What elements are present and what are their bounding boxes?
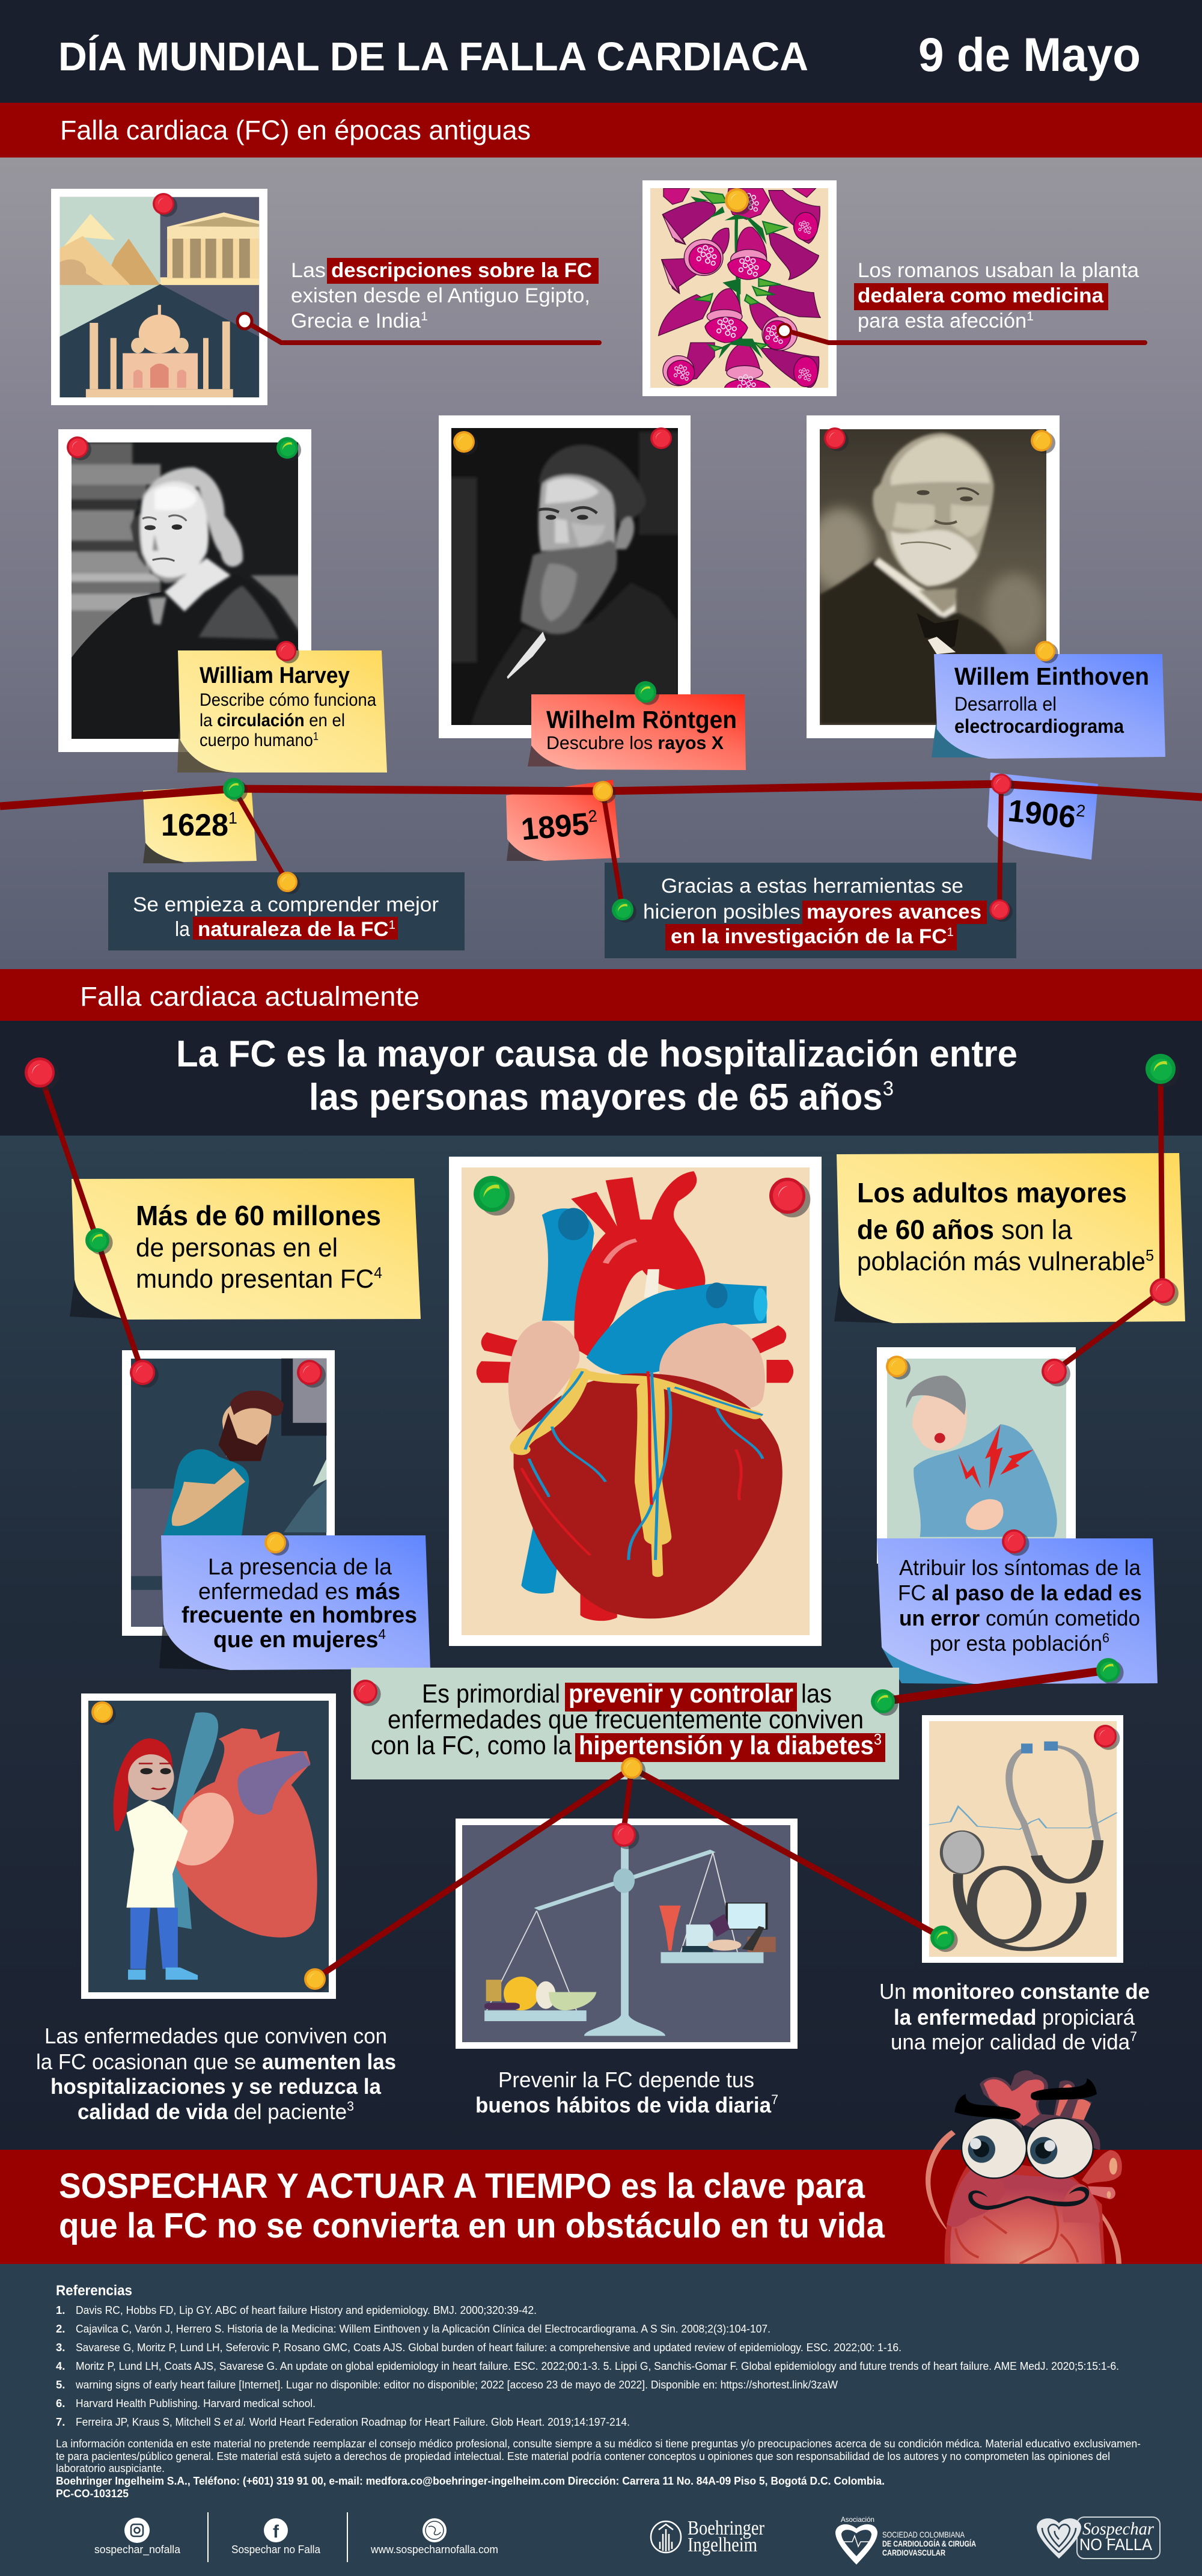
text: dedalera: Los romanos usaban la planta [858, 259, 1139, 282]
pin: heart green [474, 1176, 514, 1216]
social: facebook [231, 2518, 321, 2556]
logo: Boehringer Ingelheim: Ingelheim [688, 2534, 757, 2556]
references: 1. [56, 2304, 65, 2316]
pin: Harvey green [276, 437, 301, 461]
date: 9 de Mayo [918, 28, 1141, 81]
photo: William Harvey [58, 429, 311, 752]
connector: red pin to note [40, 1072, 142, 1372]
references: Moritz P, Lund LH, Coats AJS, Savarese G. An update on global epidemiology in heart failure. ESC. 2022;00:1-3. 5. Lippi G, Sanchis-Gomar F. Global epidemiology and future trends of heart failure. AME MedJ. 2020;5:15:1-6. [76, 2360, 1119, 2372]
headline band: las personas mayores de 65 años [309, 1077, 903, 1118]
note: 60 millones: de personas en el [136, 1233, 338, 1262]
references: Davis RC, Hobbs FD, Lip GY. ABC of heart failure History and epidemiology. BMJ. 2000;320:39-42. [76, 2304, 537, 2316]
text: buenos hábitos: buenos hábitos de vida diaria [475, 2093, 779, 2117]
text: descripciones: Grecia e India [291, 310, 418, 332]
logo: Sospechar no Falla: Sospechar [1082, 2519, 1154, 2539]
note: Wilhelm Röntgen: Wilhelm Röntgen [546, 706, 737, 733]
references: Ferreira JP, Kraus S, Mitchell S et al. World Heart Federation Roadmap for Heart Failure. Glob Heart. 2019;14:197-214. [76, 2415, 630, 2428]
note: 1628: 1 [228, 809, 237, 827]
headline band: La FC es la mayor causa de hospitalización entre [176, 1033, 1017, 1075]
callout: investigación: hicieron posibles [643, 901, 801, 923]
callout: prevenir y controlar: Es primordial [422, 1679, 560, 1709]
callout: investigación: 1 [947, 926, 954, 939]
logo: Sociedad Colombiana de Cardiología: DE CARDIOLOGÍA & CIRUGÍA [882, 2539, 976, 2548]
callout: prevenir y controlar: hipertensión y la diabetes [579, 1731, 903, 1760]
disclaimer: laboratorio auspiciante. [56, 2462, 165, 2474]
note: 1895 [506, 780, 620, 861]
text: buenos hábitos: 7 [771, 2092, 778, 2107]
note: adultos mayores [834, 1153, 1185, 1323]
references: 2. [56, 2322, 65, 2335]
note: adultos mayores: de 60 años son la [857, 1214, 1073, 1245]
note: man chest pain [159, 1535, 430, 1670]
note: adultos mayores: población más vulnerable [857, 1247, 1157, 1276]
logo: Boehringer Ingelheim: Boehringer [688, 2517, 765, 2539]
photo: man with chest pain [122, 1350, 335, 1636]
references: 6. [56, 2397, 65, 2409]
note: William Harvey: 1 [313, 730, 319, 742]
pin: band red [25, 1057, 59, 1091]
photo: elderly man [877, 1347, 1076, 1564]
references: 3. [56, 2341, 65, 2354]
pin: prevention yellow [621, 1757, 645, 1781]
callout: prevenir y controlar: prevenir y controlar [569, 1679, 793, 1709]
pin: heart red [769, 1178, 810, 1217]
photo: Wilhelm Röntgen [439, 415, 691, 738]
pin: band green [1146, 1054, 1180, 1087]
text: descripciones: descripciones sobre la FC [331, 259, 592, 282]
note: man chest pain: enfermedad es más [198, 1579, 400, 1605]
references: warning signs of early heart failure [Internet]. Lugar no disponible: editor no disponible; 2022 [acceso 23 de mayo de 2022]. Disponible en: https://shortest.link/3zaW [75, 2378, 838, 2391]
title: DÍA MUNDIAL DE LA FALLA CARDIACA [58, 34, 808, 79]
photo: anatomical heart [449, 1157, 822, 1646]
divider [207, 2512, 209, 2562]
pin: callout yellow [277, 872, 300, 894]
pin: Harvey red [67, 436, 91, 460]
disclaimer [56, 2437, 1141, 2500]
text: enfermedades conviven: hospitalizaciones y se reduzca la [50, 2074, 382, 2099]
text: dedalera [854, 259, 1139, 332]
headline band: 3 [883, 1077, 894, 1100]
pin: elderly red [1042, 1359, 1070, 1386]
pin: note green lower [1096, 1658, 1124, 1684]
social: instagram [94, 2518, 181, 2556]
connector: 1628 [234, 789, 287, 882]
note: man chest pain: frecuente en hombres [182, 1603, 417, 1628]
note: 1628: 1628 [161, 808, 231, 843]
callout: investigación: en la investigación de la FC [671, 925, 939, 948]
text: descripciones: Las [291, 259, 326, 282]
logo: Sociedad Colombiana de Cardiología: SOCIEDAD COLOMBIANA [882, 2530, 965, 2539]
pin: Einthoven note [1035, 641, 1058, 663]
note: 60 millones: Más de 60 millones [136, 1200, 381, 1231]
social: website [370, 2518, 498, 2556]
note: 1906 [987, 772, 1098, 860]
callout: prevenir y controlar: 3 [874, 1730, 882, 1748]
disclaimer: Boehringer Ingelheim S.A., Teléfono: (+601) 319 91 00, e-mail: medfora.co@boehringer-ingelheim.com Dirección: Carrera 11 No. 84A-09 Piso 5, Bogotá D.C. Colombia. [56, 2474, 885, 2487]
text: enfermedades conviven [36, 2024, 396, 2124]
logo: Sospechar no Falla [1037, 2517, 1160, 2559]
callout: naturaleza: 1 [389, 919, 395, 932]
note: 60 millones: mundo presentan FC [136, 1264, 384, 1294]
background: current section gradient [0, 1136, 1202, 2152]
note: William Harvey: Describe cómo funciona [200, 690, 376, 710]
text: dedalera: dedalera como medicina [858, 284, 1104, 307]
connector line: plant [784, 330, 1145, 343]
note: Wilhelm Röntgen [528, 694, 746, 770]
photo: Willem Einthoven [807, 415, 1060, 738]
callout: investigación [605, 863, 1016, 958]
pin: note red right [1150, 1278, 1179, 1306]
photo: stethoscope [922, 1715, 1123, 1963]
pin: elderly yellow [886, 1356, 911, 1380]
note: 60 millones [70, 1178, 421, 1320]
text: dedalera: 1 [1027, 310, 1034, 323]
photo: dedalera plant [642, 180, 837, 397]
social: facebook: f [273, 2522, 279, 2542]
disclaimer: te para pacientes/público general. Este material está sujeto a derechos de propiedad intelectual. Este material podría contener conceptos u opiniones que son responsabilidad de los autores y no comprometen las opiniones del [56, 2450, 1110, 2462]
pin: prevention red [353, 1680, 381, 1706]
text: enfermedades conviven: la FC ocasionan que se aumenten las [36, 2049, 396, 2074]
pin: stethoscope red [1094, 1725, 1120, 1750]
note: elderly man: por esta población [930, 1631, 1106, 1656]
text: descripciones: 1 [421, 310, 428, 323]
pin: white monuments [237, 313, 252, 329]
section heading: actualmente: Falla cardiaca actualmente [80, 981, 419, 1012]
note: man chest pain: 4 [378, 1626, 386, 1642]
section heading: actualmente [0, 969, 1202, 1021]
references: Cajavilca C, Varón J, Herrero S. Historia de la Medicina: Willem Einthoven y la Aplicación Clínica del Electrocardiograma. A S Sin. 2008;2(3):104-107. [76, 2322, 770, 2335]
note: elderly man: un error común cometido [899, 1606, 1140, 1630]
logo: Sociedad Colombiana de Cardiología: CARDIOVASCULAR [882, 2548, 945, 2557]
connector: prevention to note [883, 1670, 1108, 1701]
connectors: prevention to illustrations [315, 1768, 942, 1979]
text: monitoreo: la enfermedad propiciará [894, 2005, 1135, 2030]
note: elderly man: 6 [1102, 1630, 1109, 1645]
divider [347, 2512, 348, 2562]
note: William Harvey: la circulación en el [200, 711, 345, 730]
pin: prevention green [871, 1689, 898, 1716]
text: enfermedades conviven: 3 [347, 2099, 354, 2114]
note: William Harvey: William Harvey [200, 663, 350, 688]
note: 1895: 2 [587, 806, 598, 826]
text: enfermedades conviven: calidad de vida del paciente [78, 2099, 350, 2124]
references: 7. [56, 2415, 65, 2428]
pin: man corner [297, 1360, 326, 1387]
references: Referencias [56, 2283, 132, 2299]
pin: Einthoven yellow [1031, 430, 1055, 454]
note: William Harvey [177, 650, 387, 772]
note: 1906: 1906 [1006, 794, 1079, 835]
pin: timeline green [223, 778, 248, 802]
photo: lifestyle scale [456, 1819, 798, 2049]
pin: Röntgen note [635, 681, 659, 705]
logo: Sociedad Colombiana de Cardiología: Asociación [841, 2515, 874, 2524]
pin: timeline red [991, 774, 1014, 796]
references [56, 2283, 1119, 2428]
note: Willem Einthoven [932, 654, 1165, 759]
callout: investigación: Gracias a estas herramientas se [661, 875, 963, 898]
pin: doctor yellow [91, 1701, 116, 1725]
pin: monuments [153, 193, 177, 217]
note: Willem Einthoven: electrocardiograma [954, 715, 1124, 737]
section heading: antiguas [0, 103, 1202, 158]
connector: green pin to note [1054, 1069, 1162, 1371]
logo: Sociedad Colombiana de Cardiología [835, 2515, 976, 2565]
mascot: heart character [926, 2070, 1122, 2264]
connector: 1906 [999, 784, 1001, 910]
note: adultos mayores: 5 [1146, 1246, 1154, 1264]
pin: timeline yellow [593, 781, 616, 803]
pin: Röntgen yellow [453, 431, 478, 455]
note: man chest pain: que en mujeres [213, 1627, 381, 1653]
closing banner [0, 2150, 1202, 2264]
social: website: www.sospecharnofalla.com [370, 2544, 498, 2556]
callout: prevenir y controlar: enfermedades que frecuentemente conviven [388, 1705, 864, 1734]
closing banner: que la FC no se convierta en un obstáculo en tu vida [59, 2206, 885, 2245]
pin: Einthoven red [824, 427, 849, 451]
text: descripciones: existen desde el Antiguo Egipto, [291, 284, 590, 307]
references: Savarese G, Moritz P, Lund LH, Seferovic P, Rosano GMC, Coats AJS. Global burden of heart failure: a comprehensive and updated review of epidemiology. ESC. 2022;00: 1-16. [76, 2341, 902, 2354]
timeline line [0, 784, 1202, 806]
callout: prevenir y controlar: con la FC, como la [371, 1731, 572, 1760]
note: Willem Einthoven: Desarrolla el [954, 693, 1057, 715]
text: monitoreo [879, 1979, 1150, 2054]
pin: stethoscope green [930, 1926, 958, 1952]
callout: prevenir y controlar: las [801, 1679, 832, 1709]
pin: note green left [85, 1228, 113, 1255]
pin: callout green [612, 899, 636, 923]
text: enfermedades conviven: Las enfermedades que conviven con [44, 2024, 387, 2048]
logo: Sospechar no Falla: NO FALLA [1079, 2535, 1152, 2554]
background: ancient section gradient [0, 158, 1202, 969]
connector: 1895 [603, 791, 623, 910]
note: 1906: 2 [1075, 801, 1087, 821]
pin: scale red [612, 1823, 639, 1849]
callout: prevenir y controlar [351, 1668, 899, 1779]
disclaimer: La información contenida en este material no pretende reemplazar el consejo médico profesional, consulte siempre a su médico si tiene preguntas y/o preocupaciones acerca de su condición médica. Material educativo exclusivamen- [56, 2437, 1141, 2450]
callout: naturaleza: la [175, 918, 190, 941]
text: descripciones [291, 258, 599, 332]
note: Willem Einthoven: Willem Einthoven [954, 662, 1149, 690]
references: Harvard Health Publishing. Harvard medical school. [76, 2397, 316, 2409]
note: man chest pain: La presencia de la [208, 1555, 392, 1580]
pin: Harvey note [276, 641, 299, 663]
note: adultos mayores: Los adultos mayores [857, 1177, 1127, 1208]
references: 4. [56, 2360, 65, 2372]
logo: Boehringer Ingelheim [651, 2517, 765, 2556]
note: William Harvey: cuerpo humano [200, 730, 325, 750]
social: instagram: sospechar_nofalla [94, 2544, 181, 2556]
text: dedalera: para esta afección [858, 310, 1025, 332]
text: buenos hábitos: Prevenir la FC depende tus [498, 2067, 754, 2092]
callout: investigación: mayores avances [807, 901, 981, 923]
disclaimer: PC-CO-103125 [56, 2487, 129, 2500]
pin: white plant [778, 324, 791, 337]
pin: plant [725, 188, 752, 215]
note: elderly man [877, 1538, 1158, 1684]
footer background [0, 2264, 1202, 2576]
text: buenos hábitos [475, 2067, 778, 2117]
callout: naturaleza [108, 872, 465, 950]
photo: ancient monuments [51, 189, 267, 405]
connector line: monuments [245, 321, 599, 343]
social: facebook: Sospechar no Falla [231, 2544, 321, 2556]
references: 5. [56, 2378, 65, 2391]
note: elderly man: FC al paso de la edad es [898, 1580, 1142, 1605]
callout: naturaleza: naturaleza de la FC [198, 918, 384, 941]
text: monitoreo: Un monitoreo constante de [879, 1979, 1150, 2004]
note: 1895: 1895 [520, 807, 592, 847]
note: 60 millones: 4 [374, 1264, 382, 1282]
headline band [0, 1021, 1202, 1136]
pin: Röntgen red [650, 427, 675, 451]
pin: callout red [989, 899, 1013, 922]
callout: naturaleza: Se empieza a comprender mejor [133, 893, 439, 916]
pin: doctor lower [304, 1968, 329, 1992]
header band with title [0, 0, 1202, 103]
note: elderly man: Atribuir los síntomas de la [899, 1555, 1141, 1580]
pin: man note [264, 1532, 289, 1556]
closing banner: SOSPECHAR Y ACTUAR A TIEMPO es la clave para [59, 2167, 865, 2206]
text: monitoreo: 7 [1130, 2029, 1137, 2044]
section heading: antiguas: Falla cardiaca (FC) en épocas antiguas [60, 115, 531, 145]
text: monitoreo: una mejor calidad de vida [891, 2030, 1137, 2054]
pin: elderly note [1002, 1529, 1030, 1556]
note: Wilhelm Röntgen: Descubre los rayos X [546, 732, 724, 753]
pin: man red [130, 1360, 159, 1387]
photo: doctor with heart [81, 1693, 336, 1999]
note: 1628 [143, 785, 257, 863]
